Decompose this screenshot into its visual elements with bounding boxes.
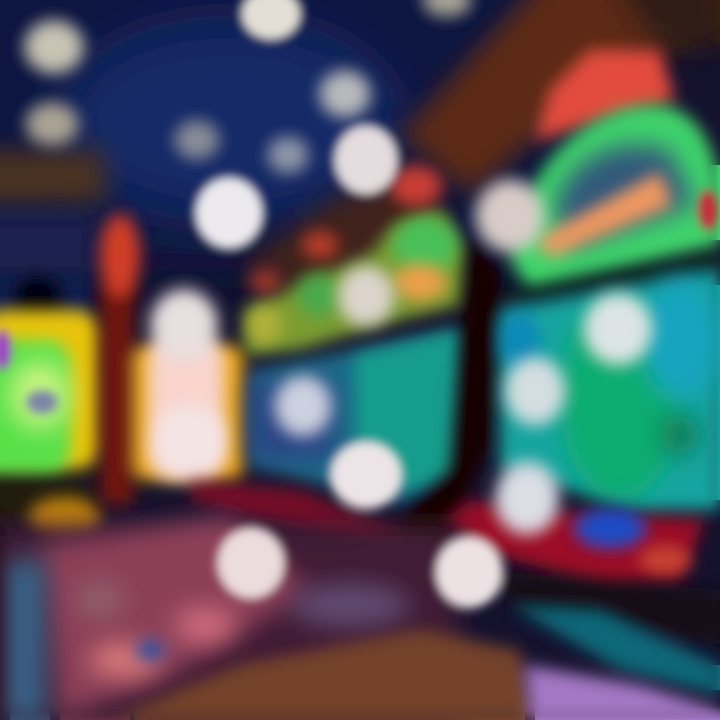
ceiling: night blue with brown beam	[0, 0, 720, 300]
middle white and orange machine	[132, 289, 244, 480]
dark pillar	[390, 235, 500, 550]
middle row toppers	[245, 166, 465, 355]
bokeh lights	[25, 0, 652, 608]
bottom edge backing colours	[10, 706, 720, 720]
right machine screens	[500, 270, 720, 510]
right machine topper	[500, 50, 720, 305]
middle row screens	[190, 328, 460, 560]
floor: carpet and bench	[0, 515, 720, 720]
right machine red console	[445, 500, 720, 695]
left machine: green and yellow	[0, 278, 101, 538]
right edge backing colours	[710, 14, 720, 690]
red pillar	[100, 214, 140, 505]
